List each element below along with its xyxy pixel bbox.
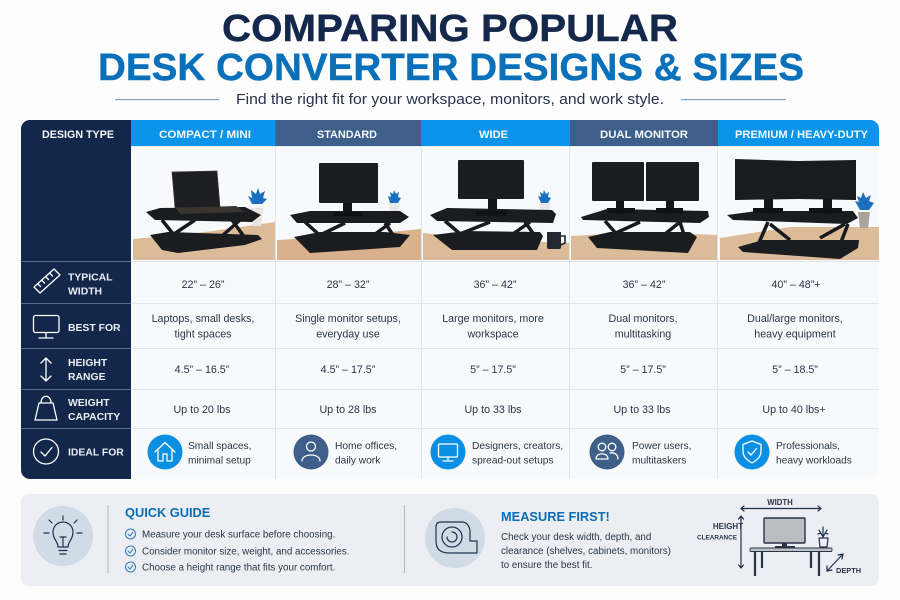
photo: wide converter bbox=[423, 160, 570, 260]
row: ideal for: heavy workloads bbox=[776, 456, 852, 466]
row: height range: 4.5” – 17.5” bbox=[321, 364, 376, 376]
measure first text: MEASURE FIRST! bbox=[501, 509, 610, 524]
measure first text: clearance (shelves, cabinets, monitors) bbox=[501, 546, 671, 557]
column headers: PREMIUM / HEAVY-DUTY bbox=[735, 129, 869, 141]
column headers: WIDE bbox=[479, 129, 508, 141]
photo: dual monitor converter bbox=[571, 162, 718, 260]
title: COMPARING POPULAR bbox=[222, 8, 678, 50]
row: best for: tight spaces bbox=[174, 328, 232, 340]
row: best for: Single monitor setups, bbox=[295, 313, 401, 325]
subtitle: Find the right fit for your workspace, monitors, and work style. bbox=[236, 92, 664, 108]
row: typical width: 28” – 32” bbox=[327, 279, 370, 291]
photo: standard converter bbox=[277, 163, 421, 260]
icon: weight bag bbox=[35, 396, 57, 420]
row: typical width: 36” – 42” bbox=[474, 279, 517, 291]
row: best for: workspace bbox=[466, 328, 519, 340]
row: ideal for: spread-out setups bbox=[472, 456, 554, 466]
quick guide text: Measure your desk surface before choosing. bbox=[142, 530, 335, 540]
diagram: desk measurements: WIDTH bbox=[767, 498, 793, 507]
row: ideal for: Professionals, bbox=[776, 441, 840, 452]
photo: premium converter bbox=[720, 159, 879, 260]
row: weight capacity: CAPACITY bbox=[68, 412, 120, 423]
diagram: desk measurements bbox=[697, 498, 861, 576]
row: weight capacity: Up to 28 lbs bbox=[319, 404, 377, 416]
row: weight capacity: WEIGHT bbox=[68, 398, 110, 409]
panel: quick guide and measure first bbox=[21, 494, 879, 586]
comparison table bbox=[21, 120, 879, 479]
column headers: STANDARD bbox=[317, 129, 377, 141]
icon: house bbox=[148, 434, 182, 470]
row: height range: 4.5” – 16.5” bbox=[175, 364, 230, 376]
row: height range: 5” – 17.5” bbox=[620, 364, 666, 376]
row: typical width: 36” – 42” bbox=[623, 279, 666, 291]
icon: desktop monitor bbox=[430, 434, 466, 470]
column headers: COMPACT / MINI bbox=[159, 129, 251, 141]
icon: shield check bbox=[734, 434, 770, 470]
row: ideal for: minimal setup bbox=[188, 456, 251, 466]
row: best for: Laptops, small desks, bbox=[152, 313, 254, 325]
quick guide text: QUICK GUIDE bbox=[125, 505, 211, 520]
row: best for: Dual/large monitors, bbox=[747, 313, 843, 325]
row: ideal for: Power users, bbox=[632, 441, 691, 452]
diagram: desk measurements: CLEARANCE bbox=[697, 534, 738, 542]
row: best for bbox=[34, 313, 843, 340]
row: height range: RANGE bbox=[68, 372, 106, 383]
photo: compact converter bbox=[133, 171, 275, 260]
diagram: desk measurements: DEPTH bbox=[836, 566, 861, 575]
icon: person bbox=[294, 434, 328, 470]
row: height range bbox=[41, 358, 818, 383]
row: best for: BEST FOR bbox=[68, 323, 121, 334]
diagram: desk measurements: HEIGHT bbox=[713, 522, 743, 531]
row: best for: multitasking bbox=[615, 328, 671, 340]
measure first text: Check your desk width, depth, and bbox=[501, 532, 651, 543]
row: weight capacity bbox=[35, 396, 826, 423]
quick guide text: Choose a height range that fits your comfort. bbox=[142, 562, 335, 574]
icon: two users bbox=[590, 434, 624, 470]
row: weight capacity: Up to 33 lbs bbox=[464, 404, 522, 416]
row: height range: 5” – 17.5” bbox=[470, 364, 516, 376]
measure first text bbox=[501, 509, 671, 571]
row: ideal for bbox=[34, 434, 852, 470]
icon: check circle bbox=[34, 439, 58, 464]
icon: monitor bbox=[34, 316, 59, 338]
row label column bbox=[21, 120, 131, 479]
row: ideal for: daily work bbox=[335, 456, 381, 466]
row: ideal for: multitaskers bbox=[632, 456, 686, 466]
row: typical width: WIDTH bbox=[68, 286, 102, 298]
row label column: DESIGN TYPE bbox=[42, 129, 114, 141]
row: weight capacity: Up to 40 lbs+ bbox=[762, 404, 826, 416]
icon: light bulb bbox=[33, 506, 93, 566]
row: typical width bbox=[34, 269, 821, 298]
row: ideal for: IDEAL FOR bbox=[68, 448, 124, 458]
icon: vertical arrow bbox=[41, 358, 51, 381]
icon: ruler bbox=[34, 269, 60, 293]
quick guide text: Consider monitor size, weight, and accessories. bbox=[142, 546, 349, 558]
row: best for: Large monitors, more bbox=[442, 313, 544, 325]
row: ideal for: Home offices, bbox=[335, 441, 397, 452]
row: best for: everyday use bbox=[316, 328, 380, 340]
row: best for: Dual monitors, bbox=[609, 313, 677, 325]
column headers bbox=[131, 120, 879, 146]
row: ideal for: Small spaces, bbox=[188, 441, 251, 452]
column headers: DUAL MONITOR bbox=[600, 129, 688, 141]
title bbox=[98, 8, 804, 89]
title: DESK CONVERTER DESIGNS & SIZES bbox=[98, 47, 804, 89]
row: height range: 5” – 18.5” bbox=[772, 364, 818, 376]
row: typical width: 22” – 26” bbox=[182, 279, 225, 291]
icon: tape measure bbox=[425, 508, 485, 568]
measure first text: to ensure the best fit. bbox=[501, 560, 592, 571]
row: weight capacity: Up to 33 lbs bbox=[613, 404, 671, 416]
row: typical width: TYPICAL bbox=[68, 272, 113, 284]
quick guide text bbox=[125, 505, 349, 574]
row: best for: heavy equipment bbox=[754, 328, 836, 340]
row: weight capacity: Up to 20 lbs bbox=[173, 404, 231, 416]
grid lines bbox=[131, 146, 879, 479]
row: ideal for: Designers, creators, bbox=[472, 441, 563, 452]
row: typical width: 40” – 48”+ bbox=[771, 279, 821, 291]
row: height range: HEIGHT bbox=[68, 358, 108, 369]
